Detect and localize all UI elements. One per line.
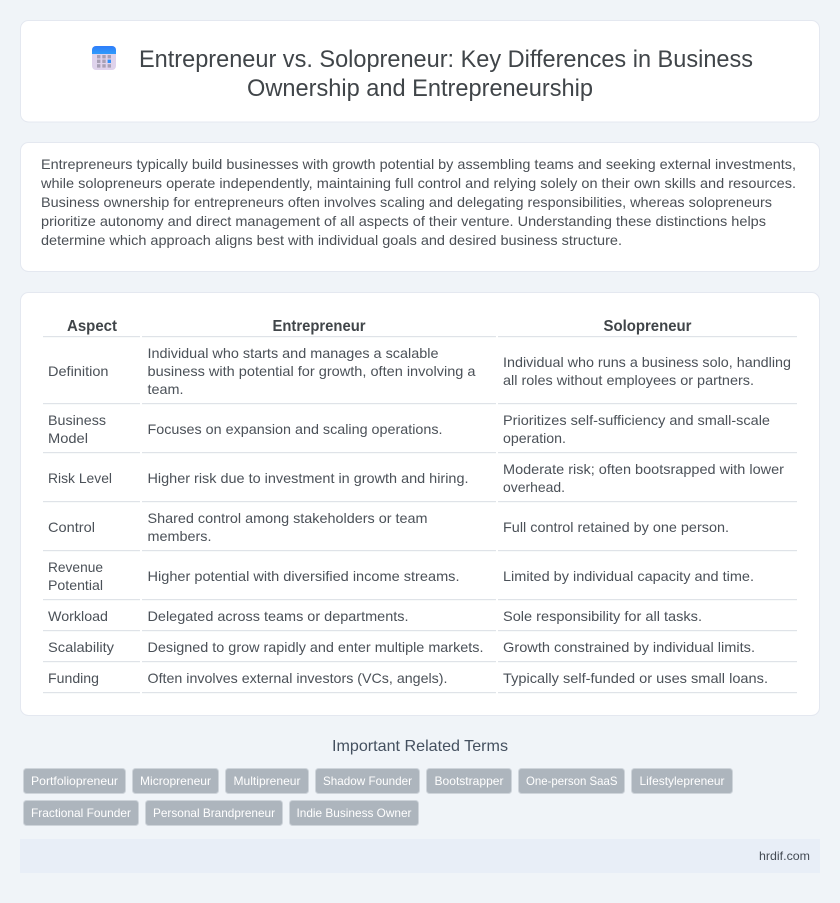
row: workload: Delegated across teams or departments.	[148, 608, 408, 624]
related term tags: Portfoliopreneur	[31, 774, 118, 788]
row: risk level: overhead.	[503, 479, 565, 495]
text block: introduction: prioritize autonomy and direct management of all aspects of their venture. Understanding these distinctions helps	[41, 213, 766, 229]
row: workload	[48, 608, 702, 624]
row: business model: operation.	[503, 430, 566, 446]
row: risk level	[48, 461, 784, 495]
icon: calendar	[92, 46, 116, 70]
related term tags: Multipreneur	[234, 774, 300, 788]
title: Ownership and Entrepreneurship	[247, 75, 593, 102]
row: control: Shared control among stakeholders or team	[148, 510, 428, 526]
related term tags: Indie Business Owner	[296, 806, 412, 820]
row: funding: Typically self-funded or uses small loans.	[503, 670, 768, 686]
row: business model: Model	[48, 430, 88, 446]
row: revenue potential	[48, 559, 754, 593]
row: revenue potential: Higher potential with diversified income streams.	[148, 568, 460, 584]
text block: introduction: Business ownership for entrepreneurs often involves scaling and delegating responsibilities, whereas solopreneurs	[41, 194, 772, 210]
row: workload: Workload	[48, 608, 108, 624]
title: Entrepreneur vs. Solopreneur: Key Differences in Business	[139, 46, 753, 73]
row: control	[48, 510, 729, 544]
row: business model: Prioritizes self-sufficiency and small-scale	[503, 412, 770, 428]
row: business model: Business	[48, 412, 106, 428]
panel: comparison table	[20, 292, 820, 716]
related term tags: One-person SaaS	[526, 774, 618, 788]
title	[139, 46, 753, 102]
panel: header	[20, 20, 820, 122]
related term tags: Shadow Founder	[323, 774, 412, 788]
related term tags: Fractional Founder	[31, 806, 131, 820]
row: risk level: Higher risk due to investment in growth and hiring.	[148, 470, 468, 486]
footer: hrdif.com	[759, 849, 810, 863]
row: definition: Individual who starts and manages a scalable	[148, 345, 439, 361]
table header row: Entrepreneur	[272, 318, 366, 335]
table header row: Solopreneur	[604, 318, 692, 335]
related term tags: Personal Brandpreneur	[153, 806, 275, 820]
row: scalability	[48, 639, 755, 655]
heading: important related terms: Important Related Terms	[332, 738, 508, 755]
related term tags: Bootstrapper	[434, 774, 504, 788]
row: risk level: Risk Level	[48, 470, 112, 486]
table header row	[67, 318, 692, 335]
row: definition: team.	[148, 381, 184, 397]
row: risk level: Moderate risk; often bootsrapped with lower	[503, 461, 784, 477]
row: definition: Definition	[48, 363, 108, 379]
row: revenue potential: Revenue	[48, 559, 103, 575]
row: workload: Sole responsibility for all tasks.	[503, 608, 702, 624]
row: definition: all roles without employees or partners.	[503, 372, 754, 388]
text block: introduction	[40, 156, 796, 248]
table header row: Aspect	[67, 318, 118, 335]
row: funding	[48, 670, 768, 686]
row: control: Full control retained by one person.	[503, 519, 729, 535]
row: definition	[48, 345, 791, 397]
text block: introduction: determine which approach aligns best with individual goals and desired business structure.	[41, 232, 622, 248]
panel: introduction	[20, 142, 820, 272]
related term tags: Micropreneur	[140, 774, 211, 788]
text block: introduction: Entrepreneurs typically build businesses with growth potential by assembling teams and seeking external investments,	[41, 156, 796, 172]
row: definition: Individual who runs a business solo, handling	[503, 354, 791, 370]
related term tags	[24, 768, 732, 826]
row: revenue potential: Potential	[48, 577, 103, 593]
row: business model	[48, 412, 770, 446]
row: revenue potential: Limited by individual capacity and time.	[503, 568, 754, 584]
row: definition: business with potential for growth, often involving a	[148, 363, 476, 379]
related term tags: Lifestylepreneur	[640, 774, 724, 788]
row: funding: Funding	[48, 670, 99, 686]
text block: introduction: while solopreneurs operate independently, maintaining full control and relying solely on their own skills and resources.	[40, 175, 796, 191]
row: funding: Often involves external investors (VCs, angels).	[148, 670, 448, 686]
row: scalability: Designed to grow rapidly and enter multiple markets.	[148, 639, 484, 655]
row: control: Control	[48, 519, 95, 535]
row: scalability: Growth constrained by individual limits.	[503, 639, 755, 655]
row: scalability: Scalability	[48, 639, 114, 655]
row: control: members.	[148, 528, 212, 544]
footer	[20, 839, 820, 873]
row: business model: Focuses on expansion and scaling operations.	[148, 421, 442, 437]
